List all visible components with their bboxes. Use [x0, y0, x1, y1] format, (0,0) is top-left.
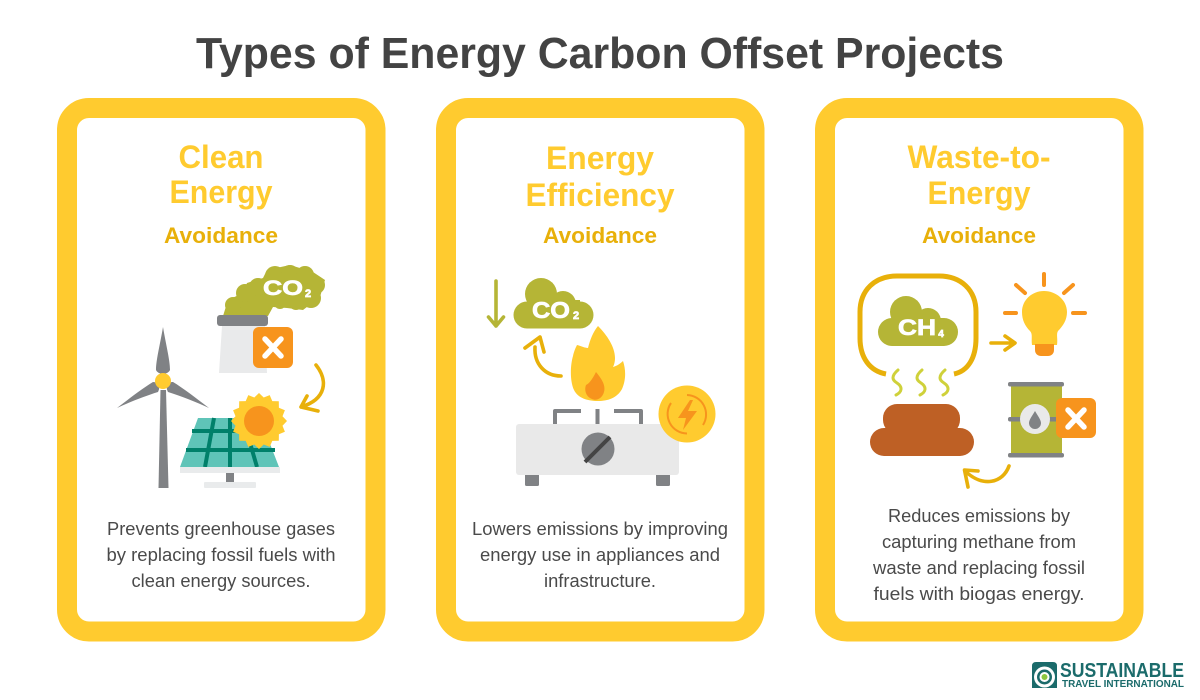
body text: energy use in appliances and: [480, 545, 720, 565]
icon: CH4 cloud: 4: [938, 329, 944, 340]
icon: CO2 cloud: 2: [573, 310, 579, 322]
icon: cancel mark: [1056, 398, 1096, 438]
icon: CO2 cloud: [514, 278, 594, 328]
body text: Prevents greenhouse gases: [107, 519, 335, 539]
logo mark: [1032, 662, 1057, 688]
body text: fuels with biogas energy.: [874, 584, 1084, 604]
icon: waste pile: [870, 404, 974, 456]
subheading: avoidance: Avoidance: [922, 223, 1036, 248]
icon: lightbulb: [1005, 274, 1085, 356]
body text: waste and replacing fossil: [872, 558, 1085, 578]
subheading: avoidance: Avoidance: [543, 223, 657, 248]
icon: flame: [571, 326, 625, 401]
heading: waste-to-energy: [908, 139, 1050, 211]
heading: energy efficiency: Efficiency: [526, 177, 675, 213]
body text: infrastructure.: [544, 571, 656, 591]
panel: clean energy: [67, 108, 376, 632]
icon: oil barrel: [1008, 382, 1064, 458]
icon: solar panel: [180, 418, 280, 488]
body text: Lowers emissions by improving: [472, 519, 728, 539]
icon: wind turbine: [117, 327, 209, 488]
icon: CH4 cloud: CH: [898, 315, 936, 340]
body text: [872, 506, 1085, 604]
arrow: flame to cloud: [525, 337, 561, 376]
heading: clean energy: Energy: [170, 174, 273, 210]
subheading: avoidance: Avoidance: [164, 223, 278, 248]
icon: methane vapours: [893, 370, 948, 395]
icon: CH4 cloud: [878, 296, 958, 346]
arrow: to lightbulb: [991, 336, 1015, 350]
icon: smokestack with CO2: CO: [263, 277, 303, 300]
body text: [106, 519, 336, 591]
panel: energy efficiency: [446, 108, 754, 632]
logo: Sustainable Travel International: TRAVEL INTERNATIONAL: [1062, 678, 1185, 690]
arrow: to renewables: [301, 365, 323, 411]
body text: capturing methane from: [882, 532, 1076, 552]
body text: clean energy sources.: [132, 571, 310, 591]
title: Types of Energy Carbon Offset Projects: [196, 29, 1004, 78]
heading: energy efficiency: Energy: [546, 140, 654, 176]
logo: Sustainable Travel International: [1032, 660, 1185, 690]
body text: Reduces emissions by: [888, 506, 1070, 526]
icon: CO2 cloud: CO: [532, 297, 570, 323]
icon: smokestack with CO2: 2: [305, 288, 311, 300]
panel: waste-to-energy: [825, 108, 1134, 632]
heading: energy efficiency: [526, 140, 675, 213]
icon: capture frame: [860, 276, 976, 374]
icon: energy coin: [658, 386, 716, 442]
body text: by replacing fossil fuels with: [106, 545, 336, 565]
heading: waste-to-energy: Waste-to-: [908, 139, 1050, 175]
icon: down arrow: [488, 281, 504, 326]
heading: clean energy: [170, 139, 273, 210]
logo: Sustainable Travel International: SUSTAINABLE: [1060, 660, 1184, 682]
arrow: barrel to waste: [964, 466, 1009, 487]
icon: sun: [231, 393, 287, 449]
heading: clean energy: Clean: [178, 139, 264, 175]
icon: smokestack with CO2: [217, 265, 325, 373]
icon: cancel mark: [253, 327, 293, 368]
heading: waste-to-energy: Energy: [928, 175, 1031, 211]
icon: stove: [516, 409, 679, 486]
body text: [472, 519, 728, 591]
